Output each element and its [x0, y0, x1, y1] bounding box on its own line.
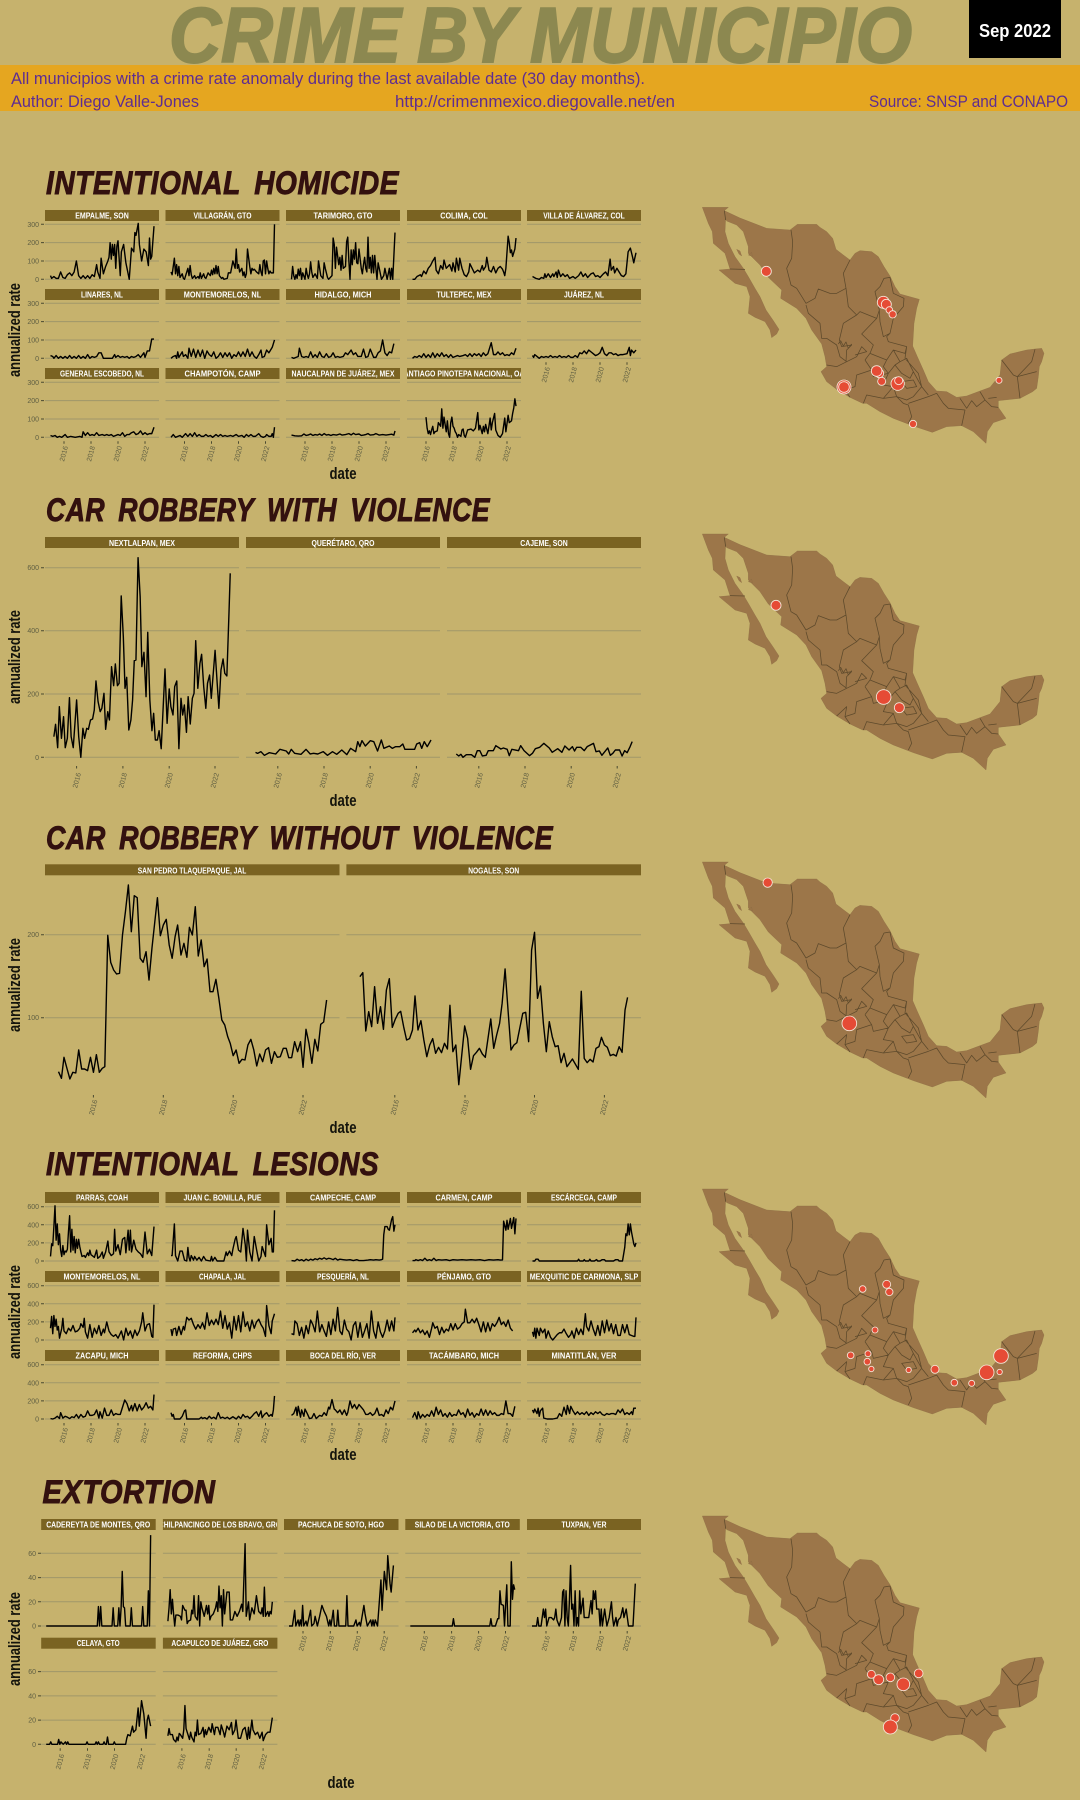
y axis labels: 200	[27, 1319, 39, 1326]
panel: Juárez: JUÁREZ, NL	[564, 289, 604, 299]
y axis labels: 60	[28, 1669, 36, 1676]
panel: San Pedro Tlaquepaque: SAN PEDRO TLAQUEPAQUE, JAL	[138, 865, 246, 875]
y axis labels: 0	[35, 1258, 39, 1266]
panel: Tacámbaro: TACÁMBARO, MICH	[429, 1350, 499, 1360]
panel: Celaya: CELAYA, GTO	[77, 1638, 120, 1648]
panel: Minatitlán	[527, 1350, 641, 1444]
panel: Querétaro: 2016	[273, 772, 284, 789]
panel: Acapulco de Juárez: 2022	[258, 1753, 269, 1770]
map: car robbery without violence	[702, 862, 1044, 1098]
panel: Champotón: 2018	[207, 445, 217, 462]
panel: Celaya: 2020	[110, 1753, 120, 1770]
panel: Cajeme: 2022	[612, 772, 623, 789]
panel: Parras: PARRAS, COAH	[76, 1192, 128, 1202]
y axis labels: 0	[35, 1338, 39, 1344]
panel: Reforma: REFORMA, CHPS	[193, 1350, 252, 1360]
panel: Boca del Río: 2018	[327, 1427, 338, 1444]
panel: Minatitlán: MINATITLÁN, VER	[552, 1350, 616, 1360]
panel: Carmen	[407, 1192, 521, 1261]
panel: Colima: COLIMA, COL	[440, 210, 488, 220]
panel: Montemorelos: MONTEMORELOS, NL	[184, 289, 261, 299]
axis title: date: date	[330, 1445, 356, 1464]
panel: Campeche	[286, 1192, 400, 1261]
panel: extortion section	[5, 1474, 641, 1792]
y axis labels: 300	[27, 301, 39, 308]
panel: car robbery without violence section	[5, 820, 641, 1137]
y axis labels: 200	[27, 932, 39, 939]
y axis labels: 0	[35, 1416, 39, 1424]
panel: Juan C. Bonilla	[166, 1192, 280, 1261]
panel: Mexquitic de Carmona	[527, 1271, 641, 1340]
panel: Cadereyta de Montes	[41, 1519, 156, 1626]
panel: Reforma: 2018	[207, 1427, 217, 1444]
panel: Celaya: 2022	[137, 1753, 147, 1770]
y axis labels: 0	[32, 1742, 36, 1749]
panel: Villagrán: VILLAGRÁN, GTO	[194, 210, 252, 220]
heading: extortion: EXTORTION	[42, 1474, 216, 1510]
panel: Chilpancingo de los Bravo: CHILPANCINGO DE LOS BRAVO, GRO	[159, 1520, 281, 1530]
panel: Naucalpan de Juárez	[286, 368, 400, 462]
axis title: annualized rate: annualized rate	[5, 1592, 24, 1686]
panel: Naucalpan de Juárez: 2018	[327, 445, 338, 462]
y axis labels: 200	[27, 1240, 39, 1247]
panel: Pénjamo	[407, 1271, 521, 1340]
panel: Campeche: CAMPECHE, CAMP	[310, 1192, 376, 1202]
panel: Nextlalpan: 2020	[164, 772, 175, 789]
panel: Tuxpan	[527, 1519, 641, 1652]
axis title: annualized rate: annualized rate	[5, 938, 24, 1032]
panel: General Escobedo: 2020	[113, 445, 124, 462]
panel: Minatitlán: 2022	[622, 1427, 633, 1444]
axis title: annualized rate: annualized rate	[5, 1265, 24, 1359]
y axis labels	[27, 565, 44, 762]
axis title: date: date	[330, 791, 356, 810]
panel: Silao de la Victoria: 2020	[474, 1635, 485, 1652]
panel: Cajeme: 2020	[566, 772, 577, 789]
panel: Zacapu: 2022	[140, 1427, 151, 1444]
panel: Tuxpan: 2022	[622, 1635, 633, 1652]
panel: Juárez: 2022	[622, 366, 633, 383]
map: homicide	[702, 207, 1044, 443]
panel: Pénjamo: PÉNJAMO, GTO	[437, 1272, 491, 1282]
panel: Tarimoro: TARIMORO, GTO	[314, 210, 373, 220]
panel: Escárcega	[527, 1192, 641, 1261]
panel: Tacámbaro	[407, 1350, 521, 1444]
panel: Querétaro: 2020	[365, 772, 376, 789]
panel: Escárcega: ESCÁRCEGA, CAMP	[551, 1192, 617, 1202]
panel: San Pedro Tlaquepaque: 2020	[229, 1099, 239, 1116]
panel: Zacapu: 2016	[59, 1427, 70, 1444]
panel: Champotón	[166, 368, 280, 462]
y axis labels: 100	[27, 416, 39, 424]
panel: Carmen: CARMEN, CAMP	[436, 1192, 493, 1202]
panel: Pesquería: PESQUERÍA, NL	[317, 1272, 369, 1282]
panel: Nogales: 2020	[530, 1099, 540, 1116]
panel: Tacámbaro: 2018	[448, 1427, 459, 1444]
panel: Hidalgo	[286, 289, 400, 358]
panel: Reforma: 2016	[180, 1427, 190, 1444]
panel: Chapala: CHAPALA, JAL	[199, 1272, 246, 1282]
y axis labels	[28, 1551, 41, 1749]
panel: Cajeme: CAJEME, SON	[520, 538, 568, 548]
heading: car robbery with violence: CAR ROBBERY WITH VIOLENCE	[46, 492, 491, 528]
panel: Zacapu: 2018	[86, 1427, 97, 1444]
y axis labels: 100	[27, 258, 39, 266]
panel: Reforma: 2020	[234, 1427, 244, 1444]
panel: Reforma: 2022	[261, 1427, 271, 1444]
panel: Querétaro: QUERÉTARO, QRO	[312, 538, 375, 548]
axis title: date: date	[330, 1118, 356, 1137]
banner: description and credits: http://crimenmexico.diegovalle.net/en	[395, 92, 675, 111]
panel: Acapulco de Juárez: 2018	[204, 1753, 215, 1770]
panel: intentional homicide section	[5, 165, 641, 483]
panel: Villa de Álvarez: VILLA DE ÁLVAREZ, COL	[543, 210, 625, 220]
panel: Minatitlán: 2018	[568, 1427, 579, 1444]
title	[169, 0, 912, 79]
panel: Pachuca de Soto: 2016	[298, 1635, 309, 1652]
panel: Acapulco de Juárez: 2020	[231, 1753, 242, 1770]
y axis labels: 200	[27, 319, 39, 326]
panel: Santiago Pinotepa Nacional: SANTIAGO PINOTEPA NACIONAL, OAX	[399, 368, 529, 378]
panel: Cajeme: 2016	[474, 772, 485, 789]
y axis labels: 0	[35, 277, 39, 284]
panel: Boca del Río: 2020	[354, 1427, 365, 1444]
panel: Santiago Pinotepa Nacional: 2022	[502, 445, 513, 462]
y axis labels	[27, 222, 44, 442]
panel: Hidalgo: HIDALGO, MICH	[314, 289, 372, 299]
y axis labels: 400	[27, 1380, 39, 1387]
panel: Montemorelos	[45, 1271, 159, 1340]
panel: Zacapu: ZACAPU, MICH	[76, 1350, 128, 1360]
y axis labels: 0	[35, 435, 39, 442]
panel: Champotón: CHAMPOTÓN, CAMP	[184, 367, 261, 378]
y axis labels: 600	[27, 565, 39, 572]
panel: San Pedro Tlaquepaque: 2018	[159, 1099, 169, 1116]
axis title: date: date	[328, 1773, 354, 1792]
y axis labels: 400	[27, 1222, 39, 1229]
y axis labels: 200	[27, 398, 39, 405]
y axis labels	[27, 932, 44, 1022]
panel: Boca del Río: 2022	[381, 1427, 392, 1444]
panel: Juárez: 2020	[595, 366, 606, 383]
panel: Cadereyta de Montes: CADEREYTA DE MONTES, QRO	[46, 1520, 151, 1530]
panel: Nogales: NOGALES, SON	[468, 865, 519, 875]
panel: Montemorelos: MONTEMORELOS, NL	[64, 1272, 140, 1282]
panel: Santiago Pinotepa Nacional: 2020	[475, 445, 486, 462]
y axis labels: 0	[32, 1624, 36, 1630]
panel: Pesquería	[286, 1271, 400, 1340]
panel: Montemorelos	[166, 289, 280, 358]
panel: Tarimoro	[286, 210, 400, 279]
date badge: Sep 2022	[979, 21, 1051, 41]
panel: Querétaro: 2018	[319, 772, 330, 789]
panel: Tuxpan: TUXPAN, VER	[562, 1520, 606, 1530]
panel: Naucalpan de Juárez: 2020	[354, 445, 365, 462]
panel: Chapala	[166, 1271, 280, 1340]
panel: Nogales	[346, 864, 641, 1116]
y axis labels: 600	[27, 1362, 39, 1369]
axis title: date: date	[330, 464, 356, 483]
panel: Empalme	[45, 210, 159, 279]
panel: San Pedro Tlaquepaque	[45, 864, 340, 1116]
panel: Champotón: 2016	[180, 445, 190, 462]
panel: Minatitlán: 2016	[541, 1427, 552, 1444]
panel: Nogales: 2018	[460, 1099, 471, 1116]
panel: Santiago Pinotepa Nacional	[407, 368, 521, 462]
banner: description and credits: All municipios with a crime rate anomaly during the last available date (30 day months).	[11, 69, 645, 88]
panel: Empalme: EMPALME, SON	[75, 210, 129, 220]
panel: Querétaro: 2022	[411, 772, 422, 789]
panel: Santiago Pinotepa Nacional: 2018	[448, 445, 459, 462]
panel: Silao de la Victoria: SILAO DE LA VICTORIA, GTO	[415, 1520, 510, 1530]
map: intentional lesions	[702, 1189, 1044, 1425]
panel: Villa de Álvarez	[527, 210, 641, 279]
map: car robbery with violence	[702, 534, 1044, 770]
panel: Boca del Río	[286, 1350, 400, 1444]
y axis labels: 200	[27, 692, 39, 698]
panel: Acapulco de Juárez	[163, 1638, 277, 1770]
panel: Celaya	[41, 1638, 156, 1770]
panel: Nextlalpan: 2022	[210, 772, 221, 789]
panel: San Pedro Tlaquepaque: 2016	[89, 1099, 99, 1116]
panel: Juárez	[527, 289, 641, 383]
y axis labels: 60	[28, 1551, 36, 1558]
panel: Colima	[407, 210, 521, 279]
y axis labels: 300	[27, 222, 39, 229]
panel: Boca del Río: 2016	[300, 1427, 311, 1444]
panel: Nextlalpan: NEXTLALPAN, MEX	[109, 538, 175, 548]
panel: Linares	[45, 289, 159, 358]
y axis labels: 0	[35, 755, 39, 762]
panel: Celaya: 2018	[83, 1753, 93, 1770]
date badge	[969, 0, 1061, 58]
panel: Zacapu	[45, 1350, 159, 1444]
panel: car robbery with violence section	[5, 492, 641, 810]
panel: Tultepec: TULTEPEC, MEX	[436, 289, 492, 299]
panel: Pachuca de Soto	[284, 1519, 398, 1652]
panel: San Pedro Tlaquepaque: 2022	[298, 1099, 309, 1116]
panel: Pachuca de Soto: 2022	[379, 1635, 390, 1652]
panel: Tuxpan: 2018	[568, 1635, 579, 1652]
panel: General Escobedo: 2018	[86, 445, 97, 462]
heading: car robbery without violence: CAR ROBBERY WITHOUT VIOLENCE	[46, 820, 554, 856]
banner: description and credits: Author: Diego Valle-Jones	[11, 92, 199, 111]
y axis labels: 300	[27, 380, 39, 387]
panel: Reforma	[166, 1350, 280, 1444]
y axis labels: 600	[27, 1204, 39, 1211]
panel: General Escobedo	[45, 368, 159, 462]
panel: Querétaro	[246, 537, 440, 789]
panel: Pachuca de Soto: PACHUCA DE SOTO, HGO	[298, 1520, 384, 1530]
y axis labels: 0	[35, 356, 39, 363]
panel: Silao de la Victoria: 2016	[419, 1635, 430, 1652]
panel: General Escobedo: 2022	[140, 445, 151, 462]
panel: Naucalpan de Juárez: 2022	[381, 445, 392, 462]
panel: Tacámbaro: 2022	[502, 1427, 513, 1444]
panel: Parras	[45, 1192, 159, 1261]
panel: Tacámbaro: 2016	[421, 1427, 432, 1444]
panel: Nextlalpan: 2018	[118, 772, 129, 789]
y axis labels: 20	[28, 1718, 36, 1725]
axis title: annualized rate: annualized rate	[5, 610, 24, 704]
panel: Tuxpan: 2020	[595, 1635, 606, 1652]
panel: Villagrán	[166, 210, 280, 279]
axis title: annualized rate: annualized rate	[5, 283, 24, 377]
panel: Champotón: 2020	[234, 445, 244, 462]
panel: Acapulco de Juárez: 2016	[177, 1753, 188, 1770]
panel: Naucalpan de Juárez: NAUCALPAN DE JUÁREZ, MEX	[292, 368, 395, 378]
panel: Juárez: 2016	[541, 366, 552, 383]
panel: Mexquitic de Carmona: MEXQUITIC DE CARMONA, SLP	[530, 1272, 639, 1282]
panel: Naucalpan de Juárez: 2016	[300, 445, 311, 462]
panel: Pachuca de Soto: 2020	[352, 1635, 363, 1652]
panel: Champotón: 2022	[261, 445, 271, 462]
y axis labels: 600	[27, 1283, 39, 1290]
panel: Santiago Pinotepa Nacional: 2016	[421, 445, 432, 462]
panel: Silao de la Victoria: 2022	[501, 1635, 511, 1652]
map: extortion	[702, 1516, 1044, 1752]
panel: Pachuca de Soto: 2018	[325, 1635, 336, 1652]
panel: intentional lesions section	[5, 1146, 641, 1464]
panel: Nogales: 2016	[390, 1099, 401, 1116]
heading: intentional homicide: INTENTIONAL HOMICIDE	[46, 165, 400, 201]
heading: intentional lesions: INTENTIONAL LESIONS	[46, 1146, 379, 1182]
y axis labels: 20	[28, 1599, 36, 1606]
panel: Juárez: 2018	[568, 366, 579, 383]
y axis labels	[27, 1204, 44, 1424]
panel: Boca del Río: BOCA DEL RÍO, VER	[310, 1350, 376, 1360]
panel: Tultepec	[407, 289, 521, 358]
panel: Tacámbaro: 2020	[475, 1427, 486, 1444]
panel: Cajeme: 2018	[520, 772, 531, 789]
panel: Tuxpan: 2016	[541, 1635, 552, 1652]
y axis labels: 400	[27, 1301, 39, 1308]
y axis labels: 100	[27, 338, 39, 344]
panel: Juan C. Bonilla: JUAN C. BONILLA, PUE	[184, 1192, 262, 1202]
panel: Linares: LINARES, NL	[81, 289, 123, 299]
y axis labels: 400	[27, 628, 39, 635]
banner: description and credits	[0, 65, 1080, 111]
panel: Nogales: 2022	[600, 1099, 610, 1116]
panel: Nextlalpan: 2016	[72, 772, 83, 789]
panel: Chilpancingo de los Bravo	[159, 1519, 281, 1626]
panel: Zacapu: 2020	[113, 1427, 124, 1444]
panel: Silao de la Victoria	[405, 1519, 520, 1652]
y axis labels: 100	[27, 1015, 39, 1022]
y axis labels: 200	[27, 1398, 39, 1405]
panel: Celaya: 2016	[55, 1753, 66, 1770]
panel: Silao de la Victoria: 2018	[447, 1635, 458, 1652]
panel: Cajeme	[447, 537, 641, 789]
panel: General Escobedo: 2016	[59, 445, 70, 462]
panel: General Escobedo: GENERAL ESCOBEDO, NL	[60, 368, 144, 378]
y axis labels: 200	[27, 240, 39, 247]
y axis labels: 40	[28, 1693, 36, 1700]
panel: Nextlalpan	[45, 537, 239, 789]
panel: Acapulco de Juárez: ACAPULCO DE JUÁREZ, GRO	[171, 1638, 269, 1648]
y axis labels: 40	[28, 1575, 36, 1582]
panel: Minatitlán: 2020	[595, 1427, 606, 1444]
